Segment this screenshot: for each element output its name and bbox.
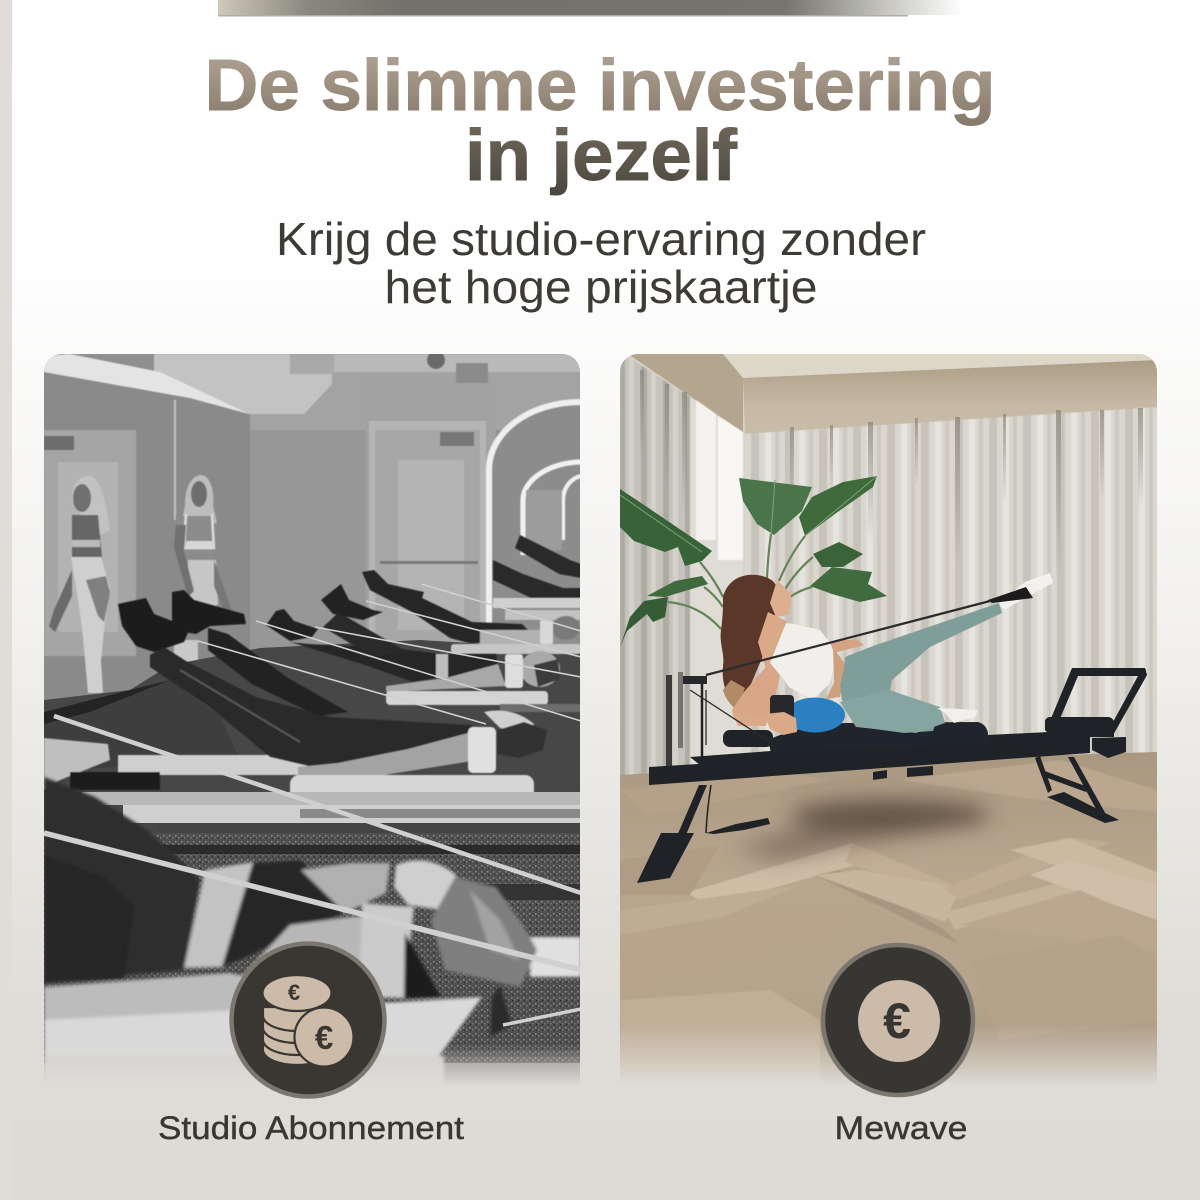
left leg (678, 785, 707, 833)
reformer (637, 668, 1147, 883)
panel: mewave photo (620, 354, 1157, 1087)
carpet (44, 833, 581, 1063)
main client (44, 590, 547, 800)
background client 3 (321, 570, 581, 660)
ceiling and walls (1141, 354, 1152, 360)
socks (937, 708, 978, 723)
mirror door (44, 430, 136, 656)
neck and shoulder (758, 612, 788, 668)
strap (988, 587, 1033, 603)
ceiling and duct (334, 354, 580, 372)
foot bar (1047, 668, 1147, 737)
rear posts (666, 675, 672, 767)
badge: studio coins: € (315, 1019, 333, 1056)
badge: studio coins (232, 944, 384, 1096)
face (770, 580, 791, 617)
bottom fade (620, 1025, 1157, 1087)
plant (620, 476, 887, 647)
label: mewave: Mewave (834, 1110, 968, 1146)
subtitle: het hoge prijskaartje (384, 261, 818, 313)
headrest and carriage (723, 730, 773, 747)
title (204, 46, 996, 196)
top (770, 623, 838, 700)
frame (649, 740, 1090, 785)
subtitle: Krijg de studio-ervaring zonder (276, 213, 926, 265)
wall and mirror (44, 354, 580, 656)
straps and cables (44, 584, 581, 1025)
woman (690, 573, 1053, 745)
cross bar (873, 770, 887, 780)
background client 2 (266, 609, 581, 712)
curtain folds (640, 370, 1143, 556)
arched mirror (490, 402, 581, 625)
title: De slimme investering (204, 46, 996, 126)
mirror figures (49, 475, 232, 717)
label: studio abonnement: Studio Abonnement (158, 1110, 464, 1146)
main rail (82, 792, 580, 823)
foreground client (44, 777, 581, 1086)
herringbone parquet (620, 760, 1157, 1087)
hand (764, 712, 797, 735)
bottom fade (44, 1045, 581, 1087)
floor shadow (733, 800, 990, 860)
floor (620, 752, 1157, 1087)
top image strip (218, 0, 963, 16)
far reformers in arch (493, 535, 581, 620)
title: in jezelf (465, 116, 738, 196)
badge: mewave euro: € (883, 993, 911, 1049)
curtains (620, 358, 1157, 790)
loop strap (706, 818, 770, 834)
left edge strip (0, 0, 12, 1200)
floor (44, 640, 581, 840)
subtitle (276, 213, 926, 313)
panel: studio photo (44, 351, 581, 1087)
studio door (369, 421, 486, 645)
arm (732, 667, 780, 718)
badge: mewave euro (823, 945, 973, 1095)
icon: euro coin (858, 980, 940, 1062)
hair (720, 574, 776, 694)
midriff (826, 647, 847, 699)
leggings (840, 603, 1002, 733)
roller (770, 695, 794, 723)
leaf A (739, 478, 812, 535)
euro signs: € (288, 980, 300, 1005)
right leg (1035, 756, 1052, 793)
icon: coin stack (262, 975, 354, 1066)
ball (785, 698, 845, 732)
